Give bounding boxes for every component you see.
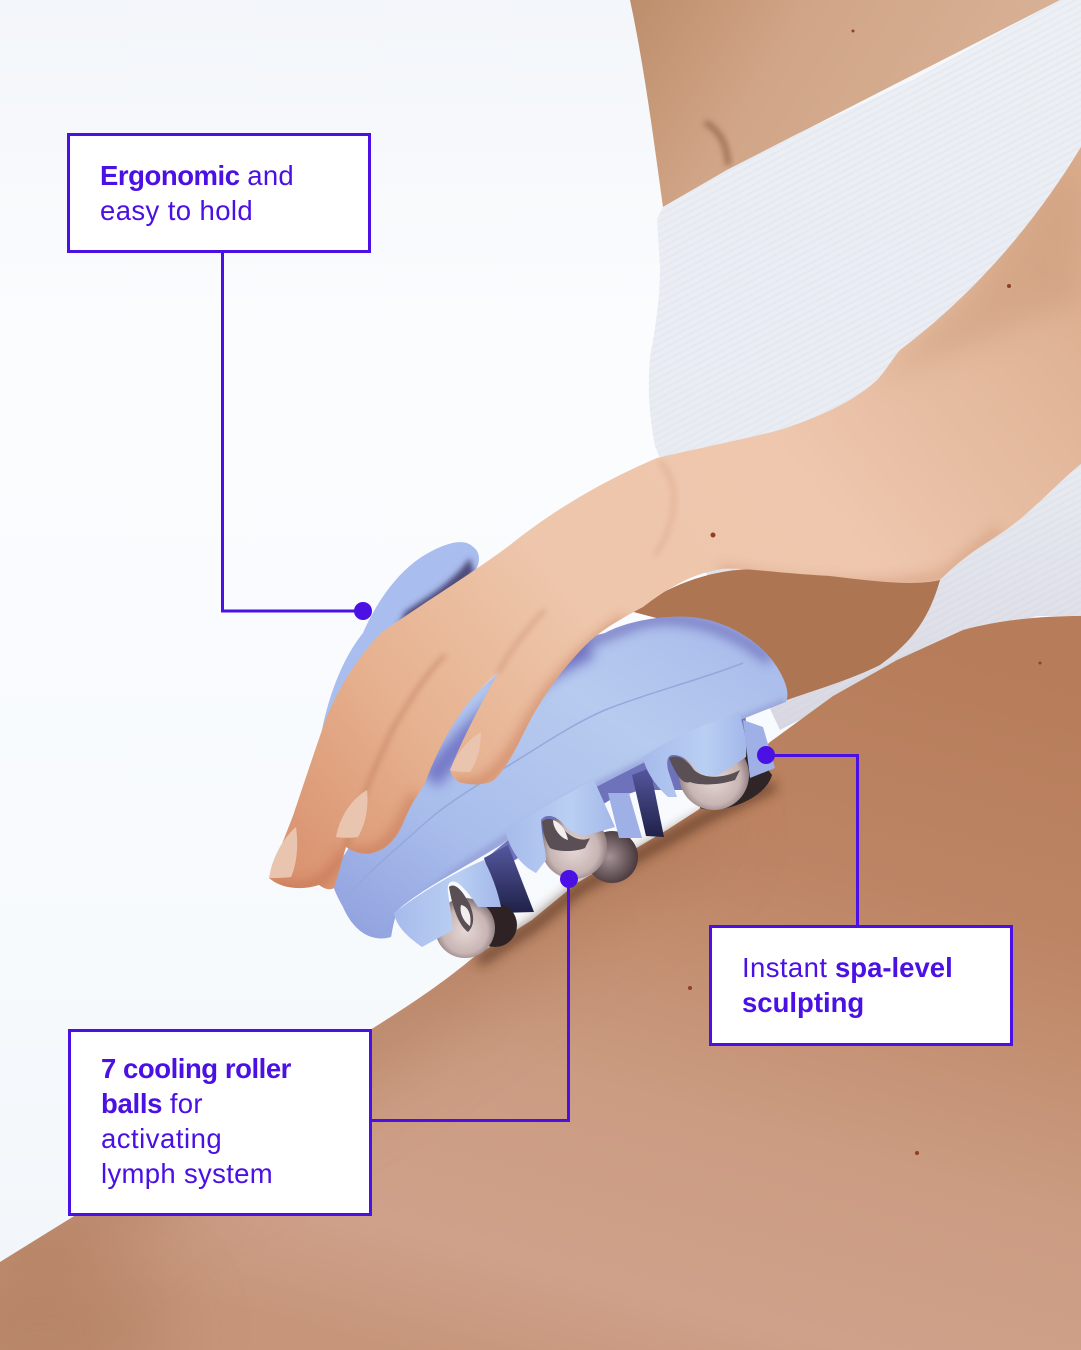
- inner arm shadow: [630, 569, 940, 700]
- callout: ergonomic: [67, 133, 371, 253]
- thigh: [0, 616, 1081, 1350]
- contact shadow on thigh: [478, 785, 775, 962]
- callout: spa-level: sculpting: [742, 987, 864, 1018]
- callout: spa-level: [709, 925, 1013, 1046]
- navel crease: [705, 122, 728, 165]
- callout: spa-level: Instant spa-level: [742, 952, 953, 983]
- torso skin: [630, 0, 1060, 207]
- roller ball middle: [505, 780, 642, 883]
- white top garment: [649, 0, 1081, 730]
- callout: roller balls: balls for: [101, 1088, 203, 1119]
- roller ball right: [643, 712, 775, 810]
- callout: roller balls: lymph system: [101, 1158, 273, 1189]
- skin moles: [688, 30, 1042, 1155]
- callout: roller balls: [68, 1029, 372, 1216]
- callout: roller balls: activating: [101, 1123, 222, 1154]
- device body: [331, 617, 787, 938]
- callout: roller balls: 7 cooling roller: [101, 1053, 291, 1084]
- device handle fin: [322, 542, 479, 730]
- dark struts under device: [484, 768, 664, 913]
- roller ball left: [394, 860, 517, 958]
- fingernails: [269, 732, 481, 878]
- callout: ergonomic: easy to hold: [100, 195, 253, 226]
- callout: ergonomic: Ergonomic and: [100, 160, 294, 191]
- hand and forearm: [269, 147, 1081, 889]
- device underside: [484, 712, 750, 870]
